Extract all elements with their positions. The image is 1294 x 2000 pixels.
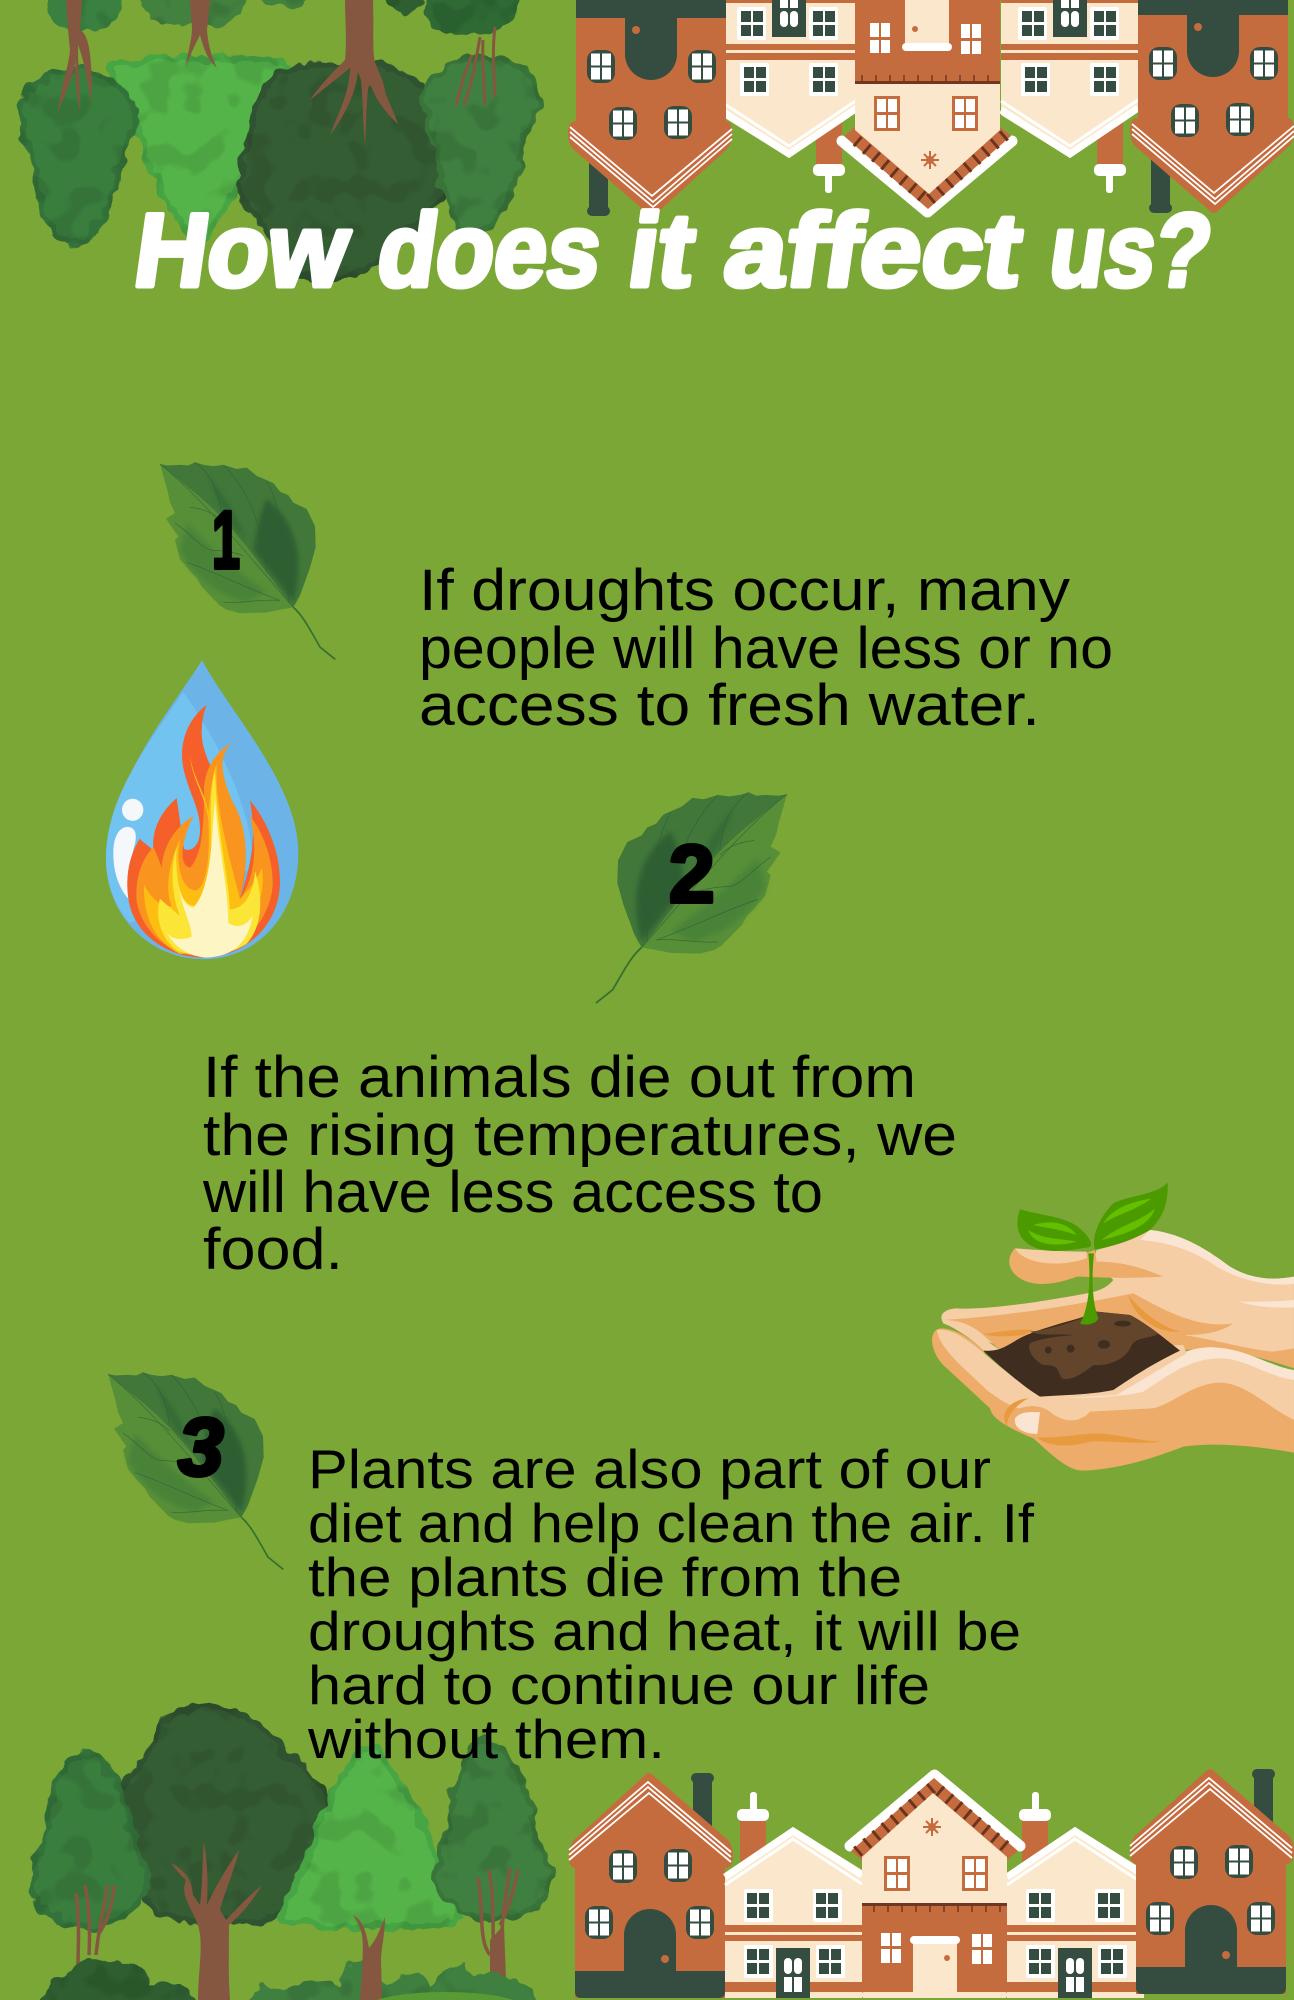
number 3: 3 [178,1402,224,1493]
top tree: mid green right [424,57,539,239]
text block 2: food. [203,1217,343,1282]
title: does [371,192,609,309]
top house right [1130,0,1294,213]
number 2: 2 [669,829,715,920]
text block 2: If the animals die out from [203,1045,916,1110]
title: us? [1043,192,1219,309]
tree: mid green right [436,1737,551,1919]
title: it [622,192,702,309]
title: affect [718,192,1029,309]
house right [1130,1769,1294,1994]
text block 3: hard to continue our life [308,1654,930,1716]
house cream left [725,1792,862,1998]
icon: hands holding seedling [932,1183,1294,1471]
bottom trunks [76,1842,518,2000]
house left [569,1773,733,1998]
text block 3 [307,1438,1035,1770]
text block 2: will have less access to [202,1160,823,1225]
bottom trees [32,1708,551,2000]
top house cream right [1001,0,1138,193]
text block 1 [419,558,1113,738]
top house centre [842,0,1012,212]
top trees (inverted) [20,0,539,278]
text block 3: the plants die from the [308,1546,902,1608]
top houses (rotated 180 degrees) [568,0,1294,216]
house centre [850,1775,1020,1998]
tree: dark green [120,1708,329,1923]
title [128,192,1219,309]
top tree: bright green [111,58,288,240]
top tree: mid green left [20,70,135,245]
text block 3: without them. [307,1708,665,1770]
text block 1: people will have less or no [419,616,1113,681]
top trunks [58,0,495,145]
leaf icon 2 [596,792,787,1003]
title: How [128,192,357,309]
text block 2: the rising temperatures, we [203,1103,957,1168]
leaf 1 with number [160,462,335,659]
tree: mid green left [32,1752,147,1927]
bottom houses [569,1769,1294,1998]
bottom bushes [33,1956,549,2000]
tree: bright green [282,1745,459,1927]
house cream right [1007,1792,1144,1998]
text block 2 [202,1045,957,1282]
top bushes [47,0,518,36]
text block 3: Plants are also part of our [308,1438,991,1500]
leaf 3 with number [108,1372,283,1569]
icon: water drop with flame [106,660,298,959]
leaf icon 3 [108,1372,283,1569]
top house left [568,0,732,216]
text block 3: droughts and heat, it will be [308,1600,1021,1662]
hill [370,1992,520,2000]
bright tree trunk [353,1915,385,2000]
text block 1: If droughts occur, many [419,558,1070,623]
number 1: 1 [212,495,240,586]
leaf icon 1 [160,462,335,659]
top tree: dark green [240,63,449,278]
text block 1: access to fresh water. [419,673,1040,738]
text block 3: diet and help clean the air. If [308,1492,1035,1554]
top house cream left [720,0,857,193]
leaf 2 with number [596,792,787,1003]
